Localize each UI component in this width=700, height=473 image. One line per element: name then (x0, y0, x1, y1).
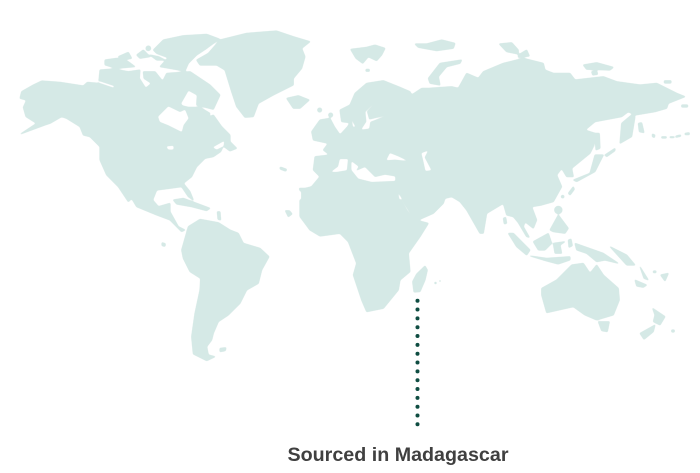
icon: Madagascar island (413, 266, 427, 292)
region: North America and Greenland (20, 31, 310, 232)
label: Sourced in Madagascar: Sourced in Madagascar (288, 444, 509, 466)
region: Southeast Asia and Oceania (503, 206, 674, 339)
region: Eurasia and North Africa (280, 40, 689, 237)
region: South America and southern Africa (162, 200, 428, 361)
dotted connector line (416, 299, 420, 426)
icon: Mauritius and Reunion dots (434, 280, 441, 284)
